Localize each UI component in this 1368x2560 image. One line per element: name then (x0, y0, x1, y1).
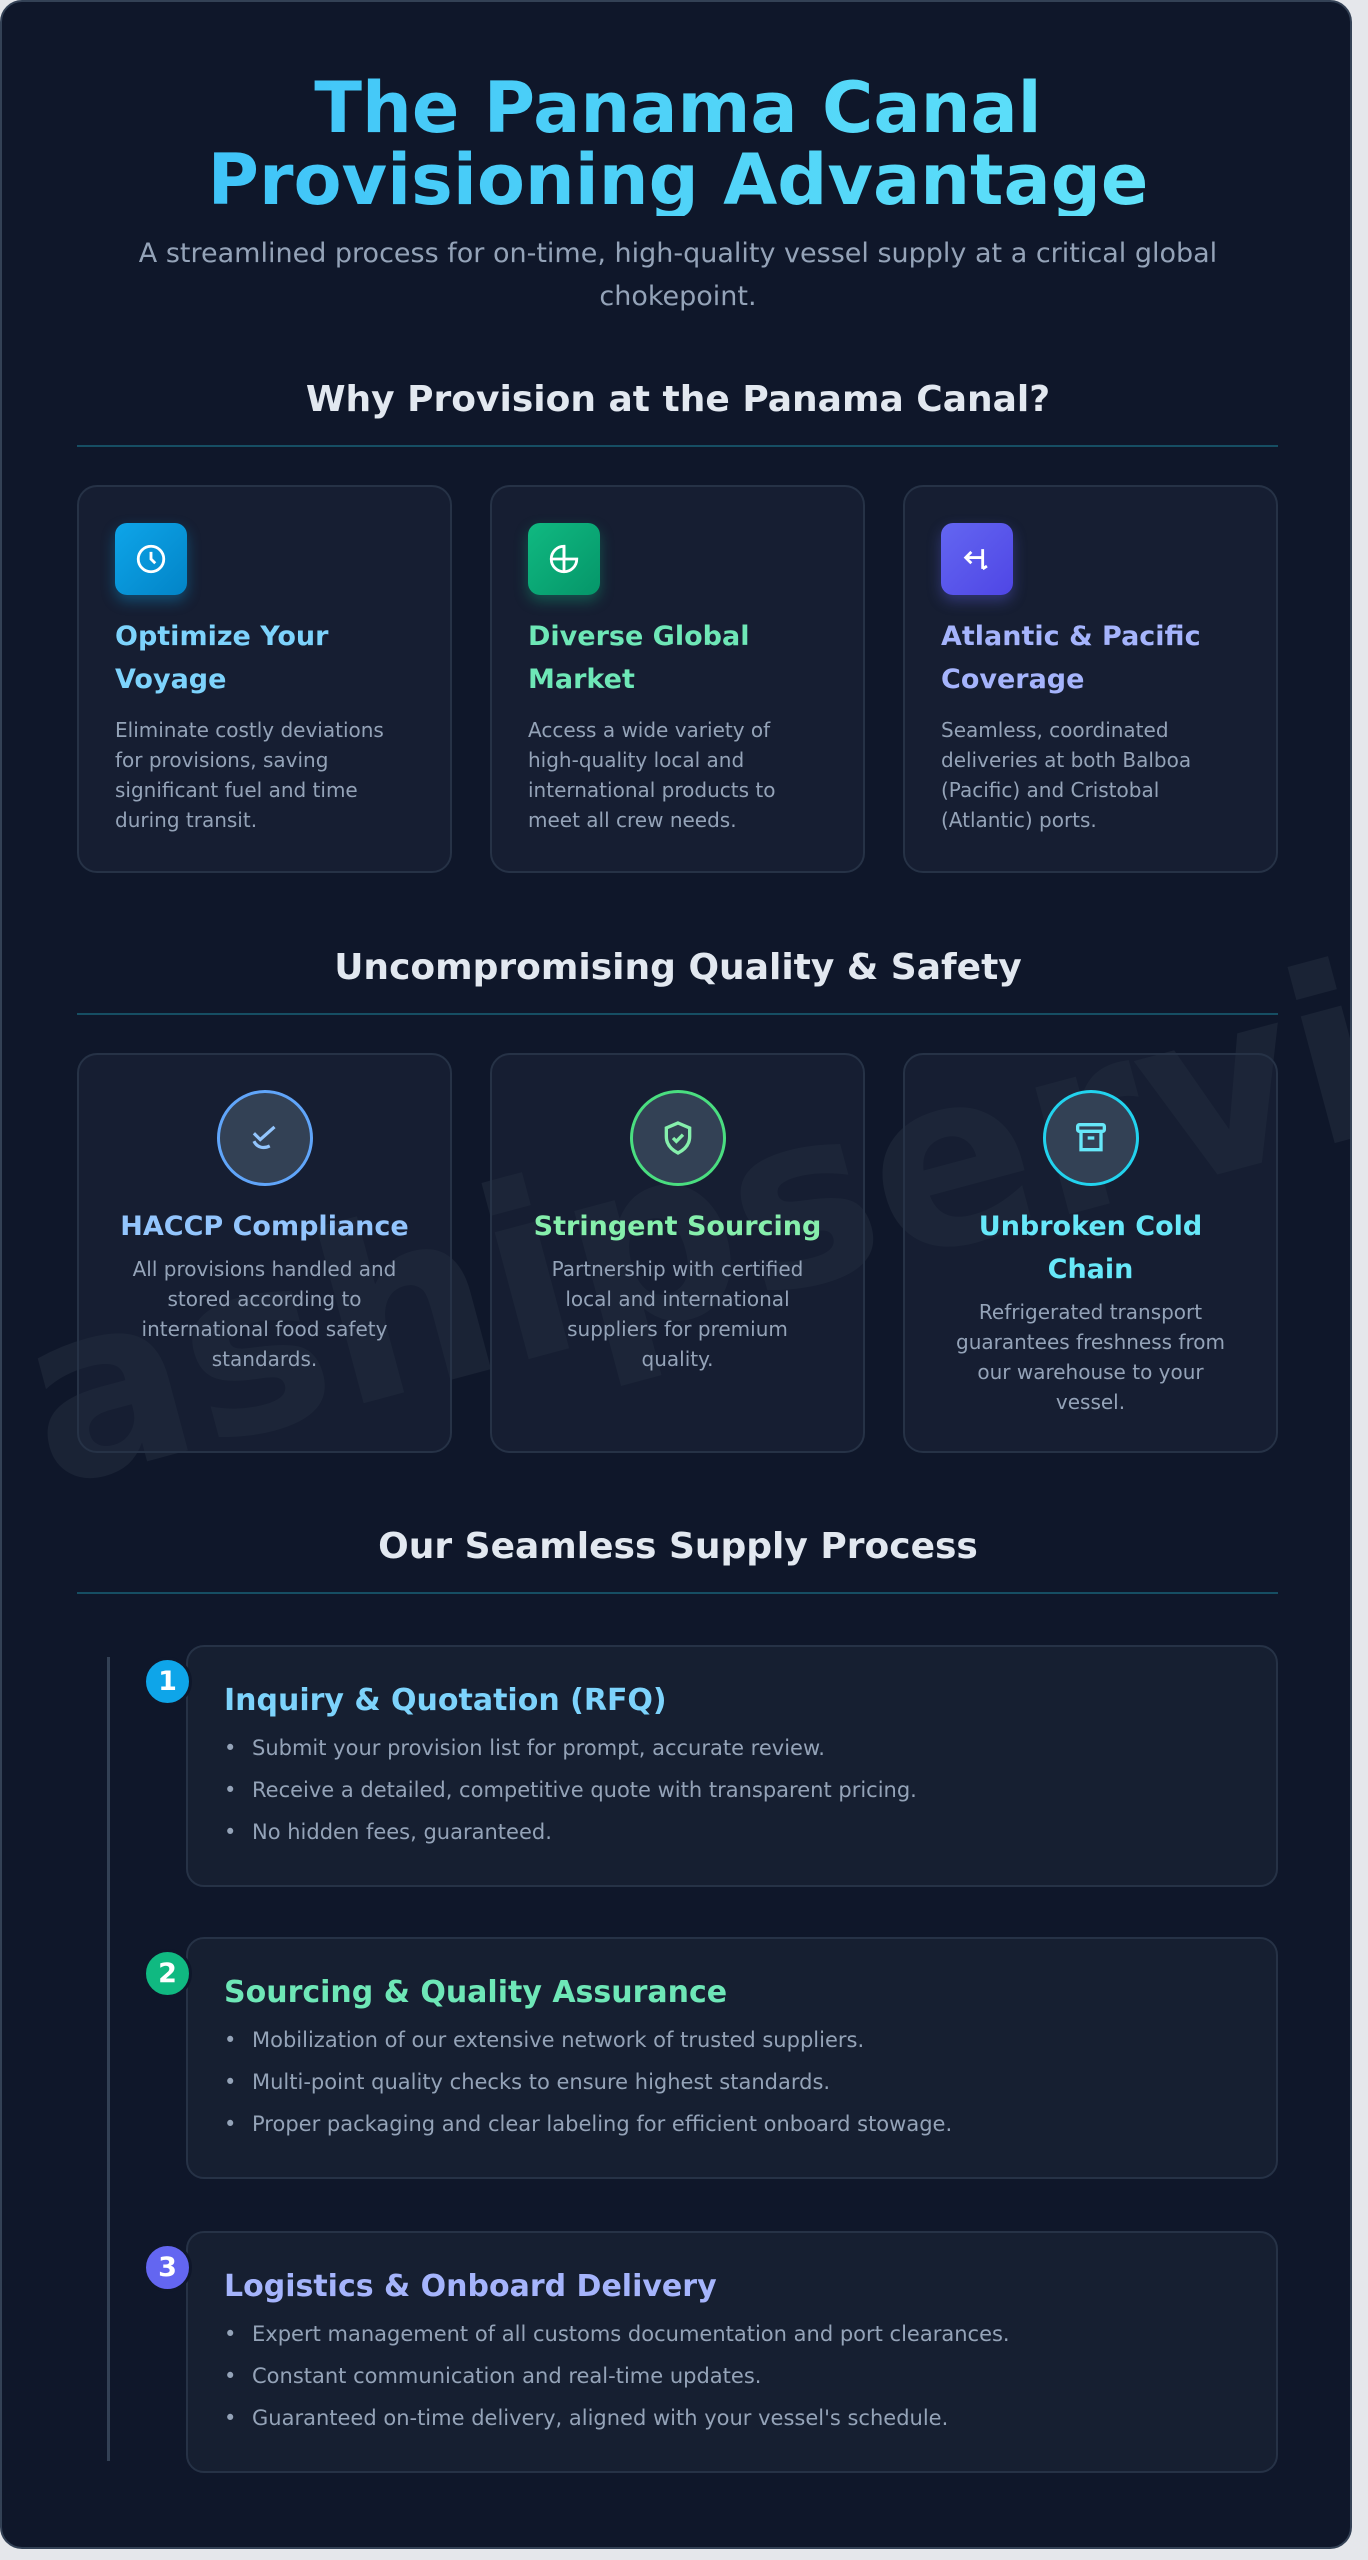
step 1: Inquiry & Quotation (RFQ) (224, 1683, 667, 1718)
step 3 (186, 2231, 1278, 2473)
icon: arrows (941, 523, 1013, 595)
number 3 (143, 2243, 192, 2292)
card: atlantic pacific: Atlantic & Pacific Coverage (941, 621, 1201, 695)
heading: quality: Uncompromising Quality & Safety (334, 947, 1022, 988)
title: Provisioning Advantage (208, 139, 1148, 221)
step 3: Constant communication and real-time updates. (252, 2364, 761, 2388)
step 1: No hidden fees, guaranteed. (252, 1820, 552, 1844)
icon: box (1043, 1090, 1139, 1186)
title (2, 72, 1354, 216)
card: cold chain (903, 1053, 1278, 1453)
step 3: Logistics & Onboard Delivery (224, 2269, 717, 2304)
title: The Panama Canal (314, 67, 1042, 149)
card: diverse market: Access a wide variety of high-quality local and international products to meet all crew needs. (528, 718, 775, 832)
step 2: Sourcing & Quality Assurance (224, 1975, 727, 2010)
number 1: 1 (158, 1666, 177, 1697)
card: atlantic pacific (903, 485, 1278, 873)
card: haccp: HACCP Compliance (120, 1211, 409, 1242)
number 1 (143, 1657, 192, 1706)
icon: shield (630, 1090, 726, 1186)
card: sourcing: Partnership with certified local and international suppliers for premium quality. (552, 1257, 803, 1371)
icon: check badge (217, 1090, 313, 1186)
step 1: Submit your provision list for prompt, accurate review. (252, 1736, 825, 1760)
step 1 (186, 1645, 1278, 1887)
heading: why provision: Why Provision at the Panama Canal? (306, 379, 1050, 420)
subtitle: A streamlined process for on-time, high-quality vessel supply at a critical global chokepoint. (139, 238, 1217, 312)
icon: clock (115, 523, 187, 595)
card: optimize voyage (77, 485, 452, 873)
step 2: Proper packaging and clear labeling for efficient onboard stowage. (252, 2112, 952, 2136)
number 2 (143, 1949, 192, 1998)
step 2: Multi-point quality checks to ensure highest standards. (252, 2070, 830, 2094)
number 3: 3 (158, 2252, 177, 2283)
card: sourcing (490, 1053, 865, 1453)
card: diverse market (490, 485, 865, 873)
card: diverse market: Diverse Global Market (528, 621, 749, 695)
step 2: Mobilization of our extensive network of trusted suppliers. (252, 2028, 864, 2052)
card: sourcing: Stringent Sourcing (534, 1211, 821, 1242)
step 3: Expert management of all customs documentation and port clearances. (252, 2322, 1010, 2346)
heading: process: Our Seamless Supply Process (378, 1526, 978, 1567)
card: haccp (77, 1053, 452, 1453)
card: optimize voyage: Eliminate costly deviations for provisions, saving significant fuel and time during transit. (115, 718, 384, 832)
number 2: 2 (158, 1958, 177, 1989)
step 1: Receive a detailed, competitive quote with transparent pricing. (252, 1778, 917, 1802)
card: optimize voyage: Optimize Your Voyage (115, 621, 328, 695)
card: haccp: All provisions handled and stored according to international food safety standards. (133, 1257, 396, 1371)
card: cold chain: Unbroken Cold Chain (979, 1211, 1202, 1285)
step 3: Guaranteed on-time delivery, aligned with your vessel's schedule. (252, 2406, 948, 2430)
step 2 (186, 1937, 1278, 2179)
icon: globe (528, 523, 600, 595)
timeline line (107, 1657, 110, 2461)
card: atlantic pacific: Seamless, coordinated deliveries at both Balboa (Pacific) and Cristobal (Atlantic) ports. (941, 718, 1191, 832)
card: cold chain: Refrigerated transport guarantees freshness from our warehouse to your vessel. (956, 1300, 1225, 1414)
